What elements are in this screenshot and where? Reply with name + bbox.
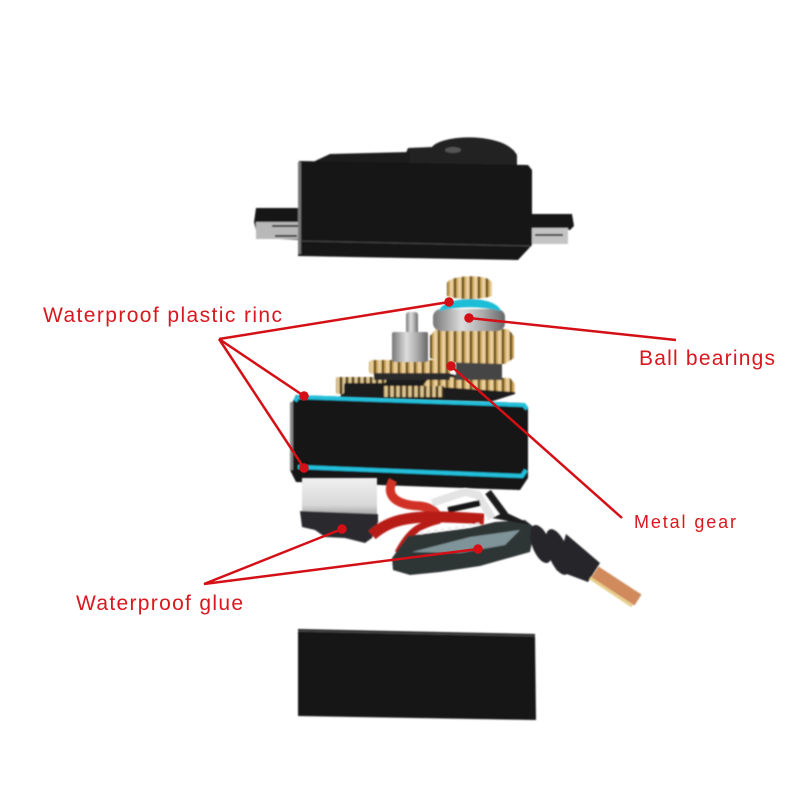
- top servo case: [254, 137, 574, 260]
- label line: metal gear: [448, 362, 622, 518]
- cable: [595, 572, 638, 600]
- bottom cyan seal: [298, 467, 526, 476]
- case body: [290, 395, 528, 490]
- right flange: [530, 214, 574, 230]
- label lines: waterproof plastic ring: [219, 298, 452, 472]
- label text: waterproof glue: Waterproof glue: [76, 592, 243, 615]
- top pinion: [447, 276, 492, 299]
- rubber grommet: [526, 522, 600, 582]
- cyan ring: [439, 299, 501, 311]
- bottom servo case: [298, 629, 536, 720]
- controller wires to case: [488, 492, 505, 515]
- left flange: [254, 208, 300, 240]
- spindle under large gear: [456, 360, 502, 380]
- gear: middle: [369, 360, 451, 374]
- middle servo case: [290, 395, 528, 490]
- case body: [298, 161, 532, 260]
- label lines: waterproof glue: [204, 526, 482, 584]
- label text: metal gear: Metal gear: [634, 512, 736, 532]
- red wires: [390, 480, 440, 522]
- top cyan seal: [295, 397, 527, 409]
- gear train: [336, 276, 515, 402]
- motor and wiring: [300, 478, 638, 606]
- large gear: [430, 329, 514, 364]
- output horn: [405, 137, 517, 165]
- ball bearing: [433, 309, 505, 331]
- post collar: [392, 332, 428, 362]
- gear: lower right: [424, 377, 515, 392]
- motor base with glue: [300, 511, 378, 543]
- gear: lower left: [336, 377, 386, 383]
- shaft post: [406, 312, 418, 336]
- circuit board with glue: [392, 520, 535, 575]
- gear: lower small: [384, 386, 444, 397]
- label text: ball bearings: Ball bearings: [639, 347, 775, 370]
- motor can: [302, 478, 377, 514]
- label line: ball bearings: [466, 314, 676, 340]
- label text: waterproof plastic ring: Waterproof plastic rinc: [43, 304, 282, 327]
- white wire: [432, 492, 492, 518]
- dark gear base: [340, 374, 515, 402]
